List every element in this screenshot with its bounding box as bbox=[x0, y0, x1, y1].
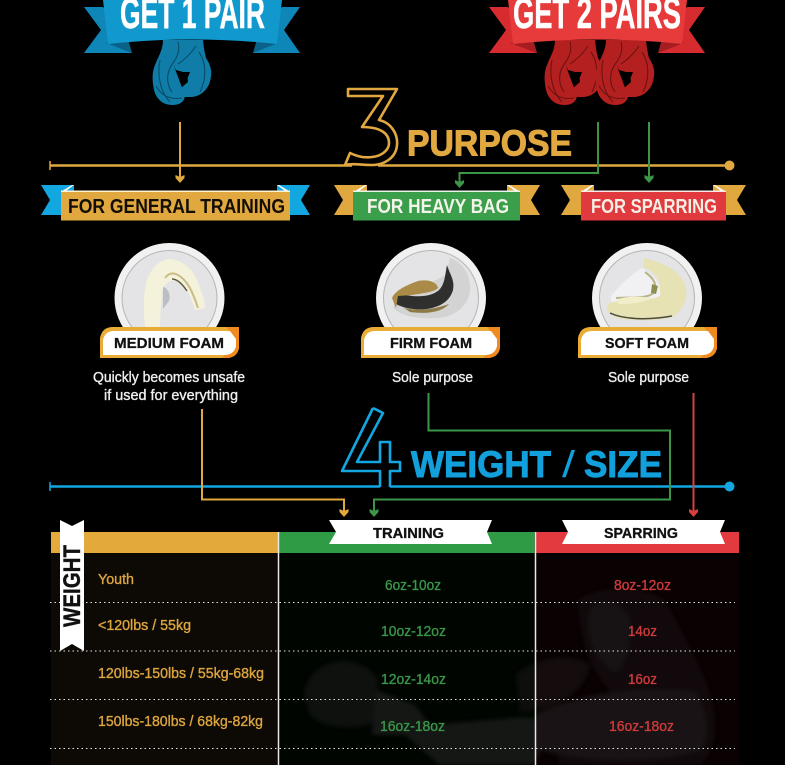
icon: red boxing gloves, second pair bbox=[596, 40, 654, 105]
section heading: 4 weight / size: SIZE bbox=[584, 444, 662, 485]
row labels: body weight: 150lbs-180lbs / 68kg-82kg bbox=[98, 714, 263, 730]
section heading: 4 weight / size: WEIGHT bbox=[411, 444, 551, 485]
training glove sizes: 10oz-12oz bbox=[381, 624, 446, 640]
ribbon: weight row heading: WEIGHT bbox=[59, 545, 86, 627]
text: firm foam description: Sole purpose bbox=[392, 370, 473, 386]
text: medium foam description: if used for everything bbox=[104, 388, 238, 404]
banner: get 1 pair bbox=[84, 0, 300, 53]
timeline: purpose bbox=[50, 160, 734, 170]
ribbon: training column: TRAINING bbox=[373, 526, 444, 542]
row labels: body weight bbox=[98, 572, 264, 730]
sparring glove sizes: 8oz-12oz bbox=[614, 578, 671, 594]
panel: firm foam bbox=[361, 243, 500, 386]
table: glove weight by body weight bbox=[50, 520, 739, 765]
arrow: two pairs to heavy bag bbox=[455, 122, 598, 188]
timeline: weight / size bbox=[50, 482, 734, 492]
label: firm foam: FIRM FOAM bbox=[390, 335, 472, 352]
ribbon: training column bbox=[329, 520, 492, 544]
row labels: body weight: <120lbs / 55kg bbox=[98, 618, 191, 634]
sparring glove sizes: 16oz-18oz bbox=[609, 719, 674, 735]
label: medium foam bbox=[100, 327, 239, 358]
training glove sizes: 16oz-18oz bbox=[380, 719, 445, 735]
training glove sizes: 12oz-14oz bbox=[381, 672, 446, 688]
ribbon: for sparring: FOR SPARRING bbox=[591, 196, 717, 218]
label: soft foam: SOFT FOAM bbox=[605, 335, 689, 352]
row labels: body weight: Youth bbox=[98, 572, 134, 588]
ribbon: for heavy bag: FOR HEAVY BAG bbox=[367, 196, 509, 218]
table header: gold bbox=[51, 532, 278, 553]
icon: soft foam cross-section bbox=[592, 243, 702, 353]
training glove sizes bbox=[380, 578, 446, 735]
section heading: 4 weight / size: / bbox=[562, 444, 576, 485]
arrow: firm foam to training bbox=[370, 393, 670, 517]
sparring glove sizes: 16oz bbox=[628, 672, 657, 688]
icon: red boxing gloves, first pair bbox=[545, 40, 603, 105]
row labels: body weight: 120lbs-150lbs / 55kg-68kg bbox=[98, 666, 264, 682]
image: faded boxer silhouette bbox=[304, 589, 715, 765]
table column backgrounds bbox=[51, 553, 739, 765]
arrow: soft foam to sparring bbox=[689, 393, 698, 517]
ribbon: for heavy bag bbox=[334, 185, 540, 220]
label: medium foam: MEDIUM FOAM bbox=[114, 335, 224, 352]
section heading: 3 purpose: PURPOSE bbox=[407, 122, 572, 164]
text: medium foam description: Quickly becomes unsafe bbox=[93, 370, 245, 386]
ribbon: for general training bbox=[41, 185, 310, 220]
ribbon: sparring column bbox=[562, 520, 725, 544]
training glove sizes: 6oz-10oz bbox=[385, 578, 441, 594]
sparring glove sizes bbox=[609, 578, 674, 735]
panel: soft foam bbox=[578, 243, 717, 386]
text: soft foam description: Sole purpose bbox=[608, 370, 689, 386]
section heading: 3 purpose bbox=[345, 89, 572, 165]
section heading: 4 weight / size bbox=[342, 408, 662, 487]
table header: red bbox=[536, 532, 739, 553]
arrow: one pair to general training bbox=[176, 122, 184, 183]
arrow: two pairs to sparring bbox=[644, 122, 654, 183]
table header: green bbox=[279, 532, 534, 553]
ribbon: for sparring bbox=[561, 185, 746, 220]
label: firm foam bbox=[361, 327, 500, 358]
label: soft foam bbox=[578, 327, 717, 358]
icon: blue boxing gloves bbox=[153, 40, 211, 105]
banner: get 2 pairs bbox=[489, 0, 705, 53]
icon: firm foam cross-section bbox=[376, 243, 486, 353]
arrow: medium foam to training bbox=[202, 409, 348, 517]
ribbon: for general training: FOR GENERAL TRAINING bbox=[68, 196, 285, 218]
sparring glove sizes: 14oz bbox=[628, 624, 657, 640]
panel: medium foam bbox=[93, 243, 249, 404]
icon: medium foam cross-section bbox=[114, 243, 224, 353]
ribbon: sparring column: SPARRING bbox=[604, 526, 678, 542]
